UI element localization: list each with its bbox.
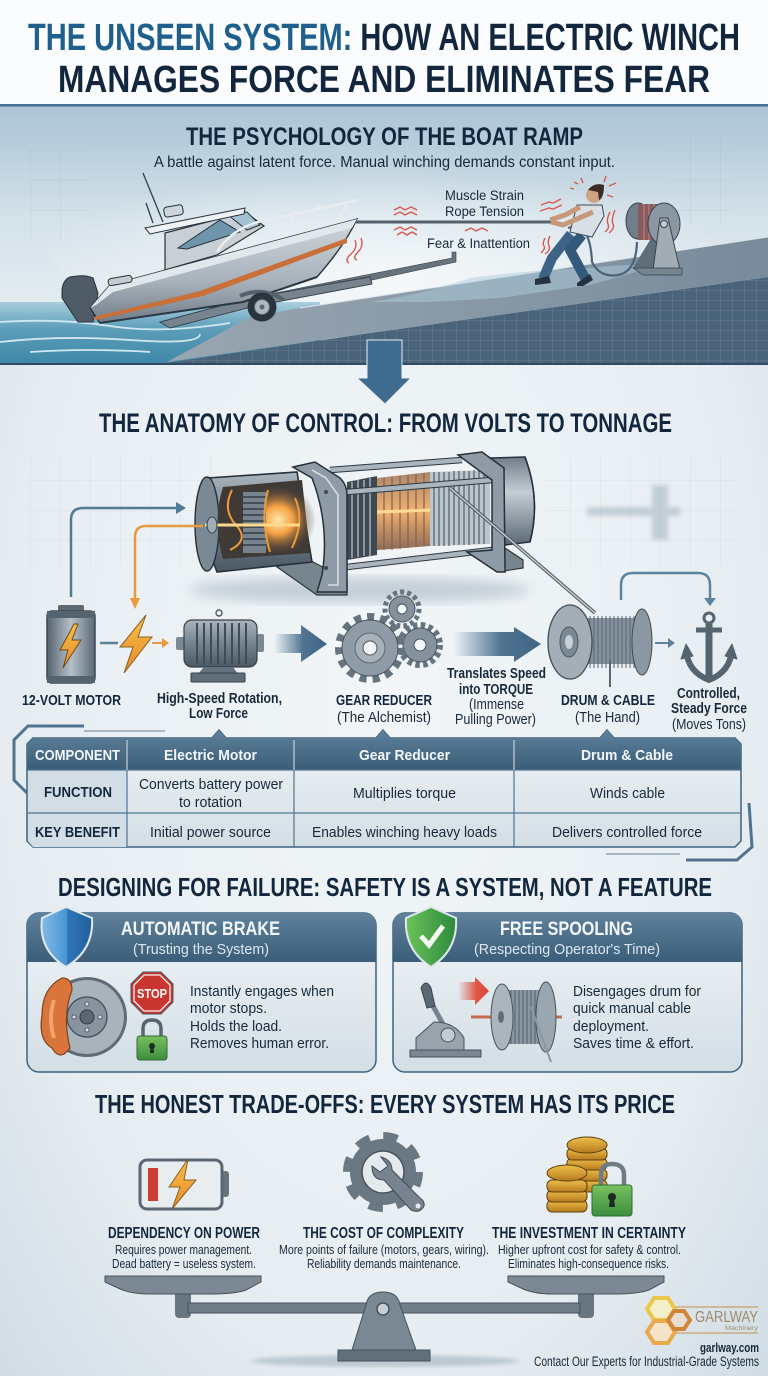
balance scale [105, 1276, 664, 1367]
card subtitle: (Trusting the System) [133, 941, 269, 958]
strain labels [427, 188, 530, 251]
component table: Multiplies torque [353, 785, 456, 802]
icon: lever [410, 983, 481, 1057]
component table: Enables winching heavy loads [312, 824, 497, 841]
flow labels: into TORQUE [459, 682, 533, 698]
trade-off: certainty: Eliminates high-consequence risks. [508, 1257, 669, 1271]
flow labels: 12-VOLT MOTOR [22, 692, 121, 709]
component table: FUNCTION [44, 784, 112, 801]
trade-off: certainty: Higher upfront cost for safety & control. [498, 1243, 681, 1257]
flow labels: Steady Force [671, 701, 747, 717]
component table: COMPONENT [35, 747, 120, 764]
rear flange [458, 452, 505, 572]
icon: stop sign: STOP [137, 986, 167, 1001]
flow labels: DRUM & CABLE [561, 693, 655, 709]
arrow: power line [71, 508, 178, 597]
boat on trailer [62, 173, 456, 328]
trade-off: power: Requires power management. [115, 1243, 252, 1257]
subtitle: A battle against latent force. Manual winching demands constant input. [154, 154, 615, 171]
winch cutaway [190, 452, 534, 603]
icon: blue shield [42, 907, 92, 967]
flow labels: High-Speed Rotation, [157, 691, 282, 707]
icon: battery [47, 605, 95, 683]
front flange [293, 462, 347, 592]
arrow: ramp to anatomy [357, 340, 411, 404]
flow labels: (Immense [469, 697, 524, 713]
tie rods [330, 460, 492, 567]
end cap [490, 457, 534, 545]
motor housing [205, 472, 312, 572]
ramp [167, 237, 768, 363]
internal rotor and drum [347, 462, 495, 566]
card body text: Saves time & effort. [573, 1035, 694, 1052]
icon: gear reducer [339, 592, 440, 679]
component table: to rotation [179, 794, 242, 811]
panel: free spooling [393, 907, 742, 1072]
trade-off: power: DEPENDENCY ON POWER [108, 1225, 260, 1242]
card body text: deployment. [573, 1018, 649, 1035]
icon: drum and cable [548, 605, 652, 687]
strain labels: Fear & Inattention [427, 236, 530, 251]
arrow [274, 625, 327, 662]
component table: Drum & Cable [581, 747, 673, 764]
icon: brake disc [41, 977, 127, 1057]
trade-off: complexity: THE COST OF COMPLEXITY [303, 1225, 464, 1242]
icon: electric motor [176, 610, 264, 682]
component table [14, 726, 752, 860]
card body text: Instantly engages when [190, 983, 334, 1000]
flow labels: Translates Speed [447, 666, 546, 682]
card subtitle: (Respecting Operator's Time) [474, 941, 660, 958]
trade-off: power [108, 1225, 260, 1271]
trade-off: certainty: THE INVESTMENT IN CERTAINTY [492, 1225, 686, 1242]
card title: AUTOMATIC BRAKE [121, 919, 280, 940]
cable from winch to drum [450, 488, 595, 613]
component table: KEY BENEFIT [35, 824, 120, 841]
water [0, 302, 320, 363]
title [0, 0, 768, 104]
card body text: Removes human error. [190, 1035, 329, 1052]
arrow [453, 627, 541, 662]
component table: Winds cable [590, 785, 665, 802]
icon: gear and wrench [348, 1137, 424, 1211]
strain marks [347, 176, 616, 263]
icon: red arrow [458, 977, 489, 1005]
icon: coins and lock [547, 1137, 632, 1216]
strained man pulling rope [535, 184, 637, 286]
arrow: orange feed [135, 526, 203, 600]
panel: automatic brake [27, 907, 376, 1072]
icon: green shield [406, 907, 456, 967]
strain labels: Rope Tension [445, 204, 524, 219]
trade-off: complexity: More points of failure (motors, gears, wiring). [279, 1243, 489, 1257]
winch reel and stand [626, 203, 682, 275]
icon: low battery [140, 1159, 229, 1209]
logo: Garlway [647, 1298, 758, 1343]
flow labels: (The Alchemist) [337, 710, 431, 726]
flow labels: Controlled, [677, 686, 740, 702]
icon: spool [471, 982, 562, 1062]
trade-off: power: Dead battery = useless system. [112, 1257, 256, 1271]
rear foot [467, 548, 523, 572]
card body text: Disengages drum for [573, 983, 701, 1000]
logo: Garlway: Machinery [725, 1326, 758, 1332]
panel: psychology of the boat ramp [0, 104, 768, 365]
flow labels: (The Hand) [575, 710, 640, 726]
component table: Converts battery power [139, 776, 283, 793]
connector [100, 642, 118, 644]
card body text [190, 983, 334, 1052]
trade-off: certainty [492, 1225, 686, 1271]
section heading: THE PSYCHOLOGY OF THE BOAT RAMP [186, 123, 583, 151]
small orange arrow [152, 638, 169, 648]
icon: padlock [137, 1020, 167, 1060]
arrow: loop to anchor [621, 573, 710, 600]
flow labels: Pulling Power) [455, 712, 536, 728]
rope [356, 220, 552, 224]
small arrow [655, 638, 675, 648]
trade-off: complexity [279, 1225, 489, 1271]
flow labels: Low Force [189, 706, 248, 722]
front foot [277, 555, 347, 595]
icon: stop sign [131, 972, 173, 1014]
component table: Electric Motor [164, 747, 257, 764]
flow labels [22, 666, 747, 733]
component table: Delivers controlled force [552, 824, 702, 841]
card title: FREE SPOOLING [500, 919, 633, 940]
card body text: quick manual cable [573, 1000, 691, 1017]
component table: Initial power source [150, 824, 271, 841]
card body text: motor stops. [190, 1000, 267, 1017]
icon: anchor [681, 613, 737, 680]
icon: orange bolt [120, 615, 152, 673]
flow labels: GEAR REDUCER [336, 693, 432, 709]
flow labels: (Moves Tons) [672, 717, 746, 733]
card body text: Holds the load. [190, 1018, 282, 1035]
card body text [573, 983, 701, 1052]
component table: Gear Reducer [359, 747, 450, 764]
strain labels: Muscle Strain [445, 188, 524, 203]
trade-off: complexity: Reliability demands maintenance. [307, 1257, 461, 1271]
